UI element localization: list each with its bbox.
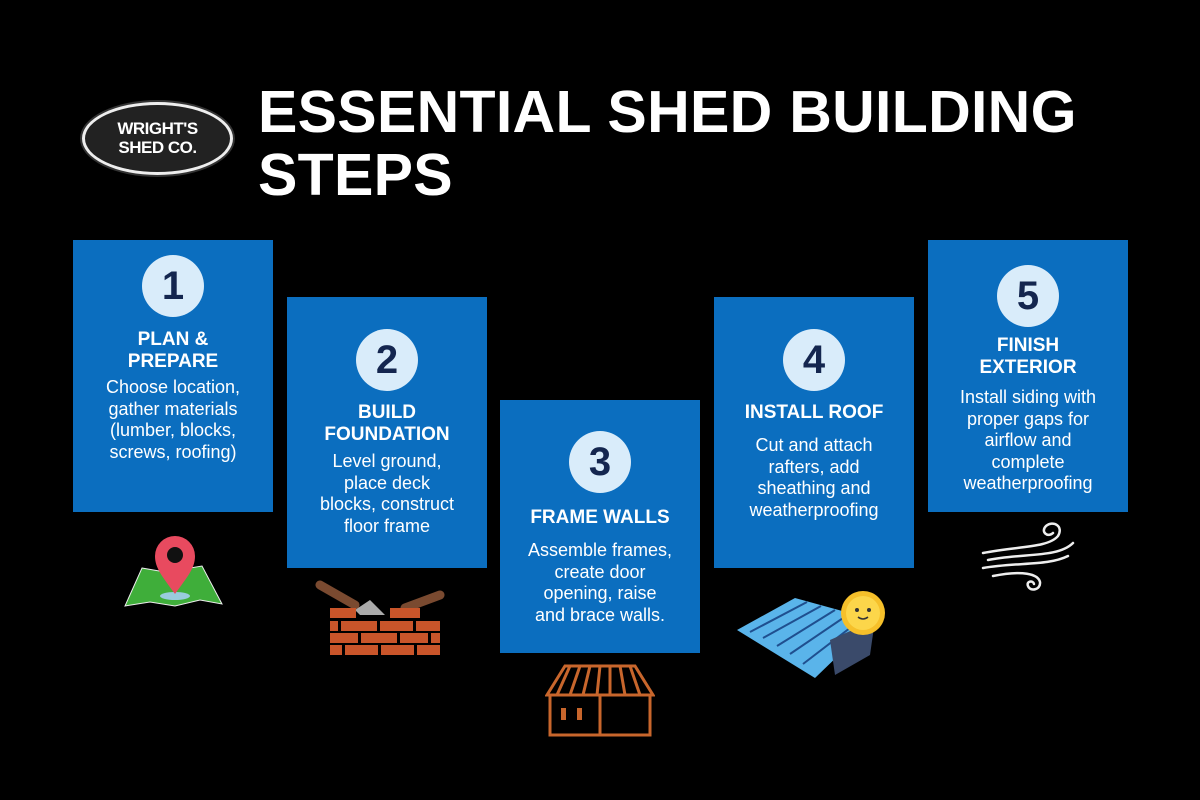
panel: step 2: FOUNDATION [324,424,450,445]
panel: step 4: Cut and attach [755,435,873,455]
logo [82,102,233,175]
panel: step 5: weatherproofing [963,473,1093,493]
panel: step 2: place deck [344,472,430,492]
panel: step 4: 4 [803,338,825,382]
panel: step 1: Choose location, [106,377,240,397]
icon: brick wall [316,580,444,655]
panel: step 5: Install siding with [960,387,1096,407]
panel: step 4: weatherproofing [749,500,879,520]
icon: wind [982,522,1074,591]
panel: step 1: PLAN & [138,329,208,350]
icon: map pin [124,536,223,607]
panel: step 5: complete [991,452,1065,472]
panel: step 5 [928,240,1128,512]
panel: step 5: airflow and [984,430,1072,450]
panel: step 5: FINISH [997,335,1059,356]
panel: step 1 [73,240,273,512]
panel: step 3: Assemble frames, [528,540,672,560]
title: STEPS [258,142,453,208]
panel: step 4: INSTALL ROOF [745,402,883,423]
panel: step 4 [714,297,914,568]
panel: step 2 [287,297,487,568]
panel: step 5: proper gaps for [967,408,1089,428]
panel: step 5: EXTERIOR [979,357,1077,378]
panel: step 1: gather materials [108,398,238,418]
panel: step 1: screws, roofing) [109,442,237,462]
panel: step 4: sheathing and [757,478,871,498]
panel: step 3: and brace walls. [535,604,665,624]
title [258,79,1077,208]
panel: step 1: (lumber, blocks, [110,420,236,440]
panel: step 1: 1 [162,264,184,308]
icon: house frame [545,664,655,736]
panel: step 2: BUILD [358,402,416,423]
panel: step 3: create door [554,562,646,582]
panel: step 5: 5 [1017,274,1039,318]
icon: roof and sun [737,591,885,678]
panel: step 3 [500,400,700,653]
panel: step 3: opening, raise [543,583,657,603]
title: ESSENTIAL SHED BUILDING [258,79,1077,145]
logo: WRIGHT'S [117,119,198,138]
panel: step 3: 3 [589,440,611,484]
panel: step 2: floor frame [344,516,430,536]
logo: SHED CO. [118,138,197,157]
panel: step 2: 2 [376,338,398,382]
panel: step 4: rafters, add [768,456,860,476]
panel: step 2: Level ground, [332,451,442,471]
panel: step 1: PREPARE [128,351,218,372]
panel: step 2: blocks, construct [320,494,454,514]
panel: step 3: FRAME WALLS [530,507,670,528]
